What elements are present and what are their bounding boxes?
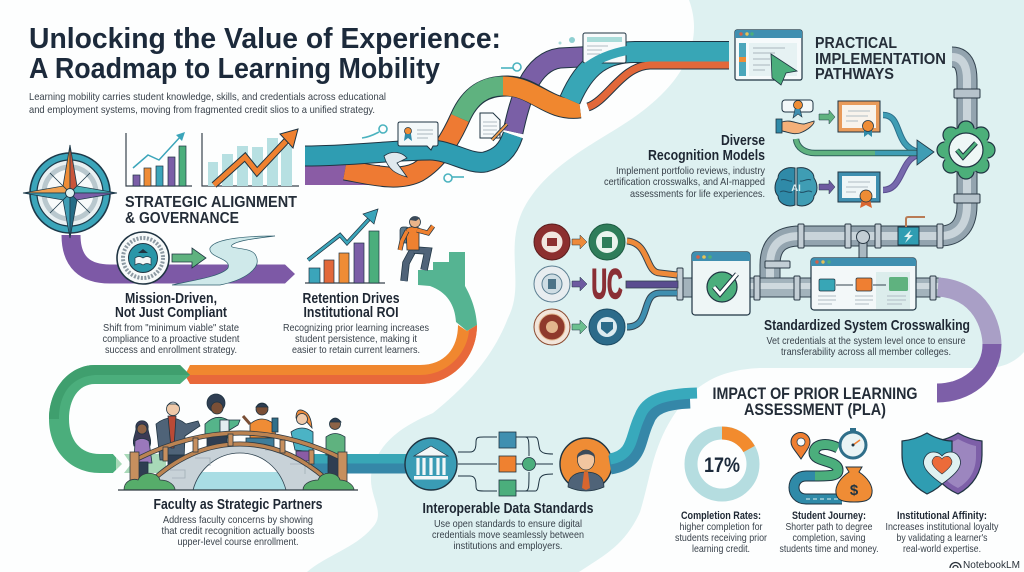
heading: practical implementation pathways: IMPLEMENTATION xyxy=(815,51,946,68)
text: faculty as strategic partners: Address faculty concerns by showing xyxy=(163,514,313,526)
people group xyxy=(133,394,345,482)
heading: practical implementation pathways: PATHWAYS xyxy=(815,66,894,83)
text: retention drives ROI: student persistence, making it xyxy=(295,333,417,345)
arrow: green to certificate xyxy=(819,110,835,124)
heading and text: diverse recognition models xyxy=(604,132,766,200)
icon: folded paper xyxy=(384,152,407,177)
text: mission-driven: success and enrollment strategy. xyxy=(105,344,237,356)
icon: crosswalk window xyxy=(811,258,916,310)
diagram: interoperable data flow xyxy=(405,432,612,496)
text: institutional affinity: real-world expertise. xyxy=(903,543,981,555)
text: standardized system crosswalking: Standardized System Crosswalking xyxy=(764,317,970,334)
pipes: upper pipeline xyxy=(765,57,980,285)
icon: winding road xyxy=(172,236,275,285)
text: completion rates: Completion Rates: xyxy=(681,510,761,522)
heading and text: diverse recognition models: assessments for life experiences. xyxy=(630,188,765,200)
text: retention drives ROI: easier to retain current learners. xyxy=(292,344,420,356)
water under bridge xyxy=(188,472,292,490)
road: orange bend xyxy=(185,325,477,384)
text: interoperable data standards: Interoperable Data Standards xyxy=(422,500,594,517)
icon: student journey road: $ xyxy=(850,482,859,499)
heading: impact of PLA: IMPACT OF PRIOR LEARNING xyxy=(712,384,918,403)
chart: small growth bars xyxy=(126,132,192,186)
stone arch xyxy=(153,443,325,490)
icon: compass xyxy=(23,145,117,238)
arrow: green to road xyxy=(172,248,206,268)
text: interoperable data standards: Use open standards to ensure digital xyxy=(434,518,582,530)
text: faculty as strategic partners xyxy=(154,496,322,548)
text: student journey: students time and money. xyxy=(780,543,878,555)
wooden rails xyxy=(137,433,343,478)
posts xyxy=(130,434,347,483)
text: student journey: completion, saving xyxy=(792,532,866,544)
chart: 17% donut: 17% xyxy=(704,454,740,477)
icon: gear with check xyxy=(937,121,995,179)
text: student journey xyxy=(780,510,878,555)
heading and text: diverse recognition models: Recognition Models xyxy=(648,147,765,164)
decorative nodes xyxy=(362,37,575,182)
arrows: recognition paths into gear xyxy=(796,115,934,190)
bushes xyxy=(124,473,354,490)
watermark: NotebookLM: NotebookLM xyxy=(963,559,1020,571)
ribbon: purple connector to PLA xyxy=(937,287,992,393)
road: green bend xyxy=(49,365,190,473)
text: institutional affinity: Institutional Affinity: xyxy=(897,510,987,522)
text: faculty as strategic partners: Faculty as Strategic Partners xyxy=(154,496,322,513)
chart: large growth bars with orange arrow xyxy=(202,129,299,186)
chart: retention bars xyxy=(305,209,385,283)
icon: check window xyxy=(692,252,750,315)
text: institutional affinity xyxy=(886,510,999,555)
heading: impact of PLA: ASSESSMENT (PLA) xyxy=(744,400,886,419)
icon: orange certificate xyxy=(838,101,880,137)
heading: impact of PLA xyxy=(712,384,918,419)
ribbon: teal to PLA xyxy=(610,393,697,465)
pipes: lower pipeline xyxy=(677,268,940,300)
arrow: purple to certificate xyxy=(819,180,835,194)
text: mission-driven: Not Just Compliant xyxy=(115,304,227,321)
title: Unlocking the Value of Experience: xyxy=(29,23,501,55)
text: mission-driven: Mission-Driven, xyxy=(125,290,217,307)
college seals and flows xyxy=(534,224,678,345)
text: completion rates: higher completion for xyxy=(680,521,763,533)
subtitle: Learning mobility carries student knowledge, skills, and credentials across educational xyxy=(29,91,386,103)
heading and text: diverse recognition models: certification crosswalks, and AI-mapped xyxy=(604,176,765,188)
icon: AI brain xyxy=(775,168,817,206)
text: mission-driven xyxy=(102,290,240,356)
college seals and flows: UC xyxy=(592,260,622,307)
text: completion rates xyxy=(675,510,767,555)
chart: 17% donut xyxy=(691,433,753,495)
heading and text: diverse recognition models: Diverse xyxy=(721,132,765,149)
text: retention drives ROI xyxy=(283,290,429,356)
icon: diploma scroll over hand xyxy=(776,100,814,134)
text: retention drives ROI: Institutional ROI xyxy=(304,304,398,321)
text: standardized system crosswalking: Vet credentials at the system level once to ensure xyxy=(766,335,966,347)
icon: student journey road xyxy=(791,428,872,502)
icon: stairs xyxy=(418,252,477,331)
subtitle xyxy=(29,91,386,116)
text: institutional affinity: by validating a learner's xyxy=(896,532,988,544)
text: institutional affinity: Increases institutional loyalty xyxy=(886,521,999,533)
heading: strategic alignment xyxy=(125,194,297,227)
illustration: faculty on bridge xyxy=(118,394,358,490)
text: student journey: Student Journey: xyxy=(792,510,866,522)
text: completion rates: learning credit. xyxy=(692,543,750,555)
text: faculty as strategic partners: upper-level course enrollment. xyxy=(178,536,298,548)
text: student journey: Shorter path to degree xyxy=(786,521,873,533)
heading: strategic alignment: STRATEGIC ALIGNMENT xyxy=(125,194,297,211)
text: standardized system crosswalking: transferability across all member colleges. xyxy=(781,346,951,358)
heading: strategic alignment: & GOVERNANCE xyxy=(125,210,239,227)
icon: browser window with cursor xyxy=(735,30,802,85)
icon: certificate bubble xyxy=(398,122,438,150)
heading and text: diverse recognition models: Implement portfolio reviews, industry xyxy=(616,165,766,177)
text: retention drives ROI: Retention Drives xyxy=(302,290,400,307)
icon: data sheet on ribbon xyxy=(583,33,630,70)
text: mission-driven: compliance to a proactive student xyxy=(102,333,240,345)
background: light teal blob xyxy=(307,0,1024,572)
text: interoperable data standards: credentials move seamlessly between xyxy=(432,529,584,541)
subtitle: and employment systems, moving from fragmented credit slios to a unified strategy. xyxy=(29,104,375,116)
ribbons: tangled credential strands xyxy=(305,52,729,185)
heading: practical implementation pathways xyxy=(815,35,946,83)
text: completion rates: students receiving prior xyxy=(675,532,767,544)
icon: document with pencil xyxy=(480,113,507,140)
title xyxy=(29,23,501,85)
heading: practical implementation pathways: PRACTICAL xyxy=(815,35,897,52)
text: retention drives ROI: Recognizing prior learning increases xyxy=(283,322,429,334)
icon: teal certificate xyxy=(838,172,880,208)
text: mission-driven: Shift from "minimum viable" state xyxy=(103,322,239,334)
icon: institution xyxy=(405,438,457,490)
icon: institution seal xyxy=(117,232,169,284)
text: standardized system crosswalking xyxy=(764,317,970,358)
road: purple path from compass xyxy=(71,235,295,284)
icon: AI brain: AI xyxy=(791,183,801,194)
icon: overlapping shields with heart xyxy=(902,433,982,494)
icon: climbing person xyxy=(400,216,433,281)
text: faculty as strategic partners: that credit recognition actually boosts xyxy=(162,525,314,537)
icon: professional xyxy=(560,438,612,491)
title: A Roadmap to Learning Mobility xyxy=(29,53,440,85)
text: interoperable data standards xyxy=(422,500,594,552)
road: teal segment to institution xyxy=(310,454,410,474)
text: interoperable data standards: institutions and employers. xyxy=(454,540,562,552)
